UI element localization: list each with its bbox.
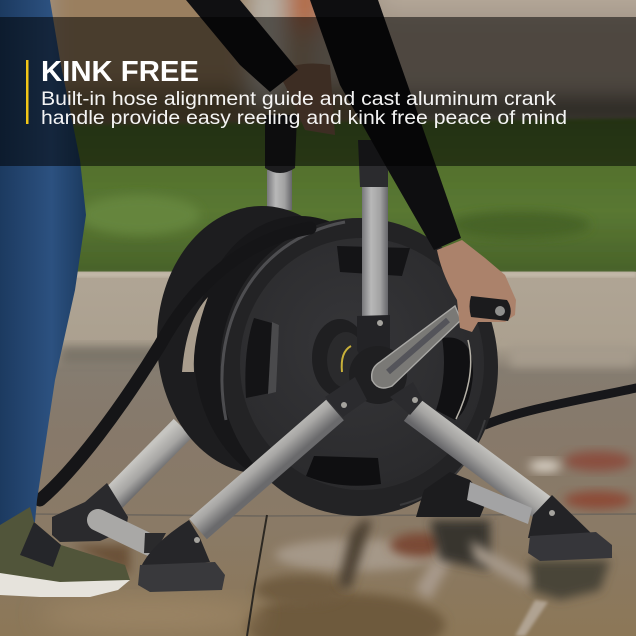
yellow accent bar [26, 60, 28, 124]
rear flange [157, 206, 367, 474]
hub ring [312, 319, 368, 397]
rear pole [265, 115, 297, 210]
left sleeve [186, 0, 298, 92]
slot: left [245, 318, 279, 398]
vertical pole [362, 187, 388, 319]
body text: handle provide easy reeling and kink free peace of mind [41, 108, 567, 129]
reel frame [138, 140, 612, 592]
slot: bottom [306, 456, 381, 486]
slot: right [436, 337, 473, 420]
blurred wall [0, 0, 636, 140]
front left foot [138, 520, 225, 592]
center bracket [325, 315, 423, 417]
hose reel [157, 206, 498, 516]
rear leg and foot [52, 428, 183, 553]
front right foot [528, 495, 612, 561]
crank handle [470, 296, 511, 321]
rear flange opening [182, 297, 208, 372]
person: jeans [0, 0, 86, 527]
person: arm sleeves and hands [186, 0, 516, 332]
slot: top [337, 246, 410, 276]
hose: right section on ground [485, 388, 636, 425]
front flange rim [220, 218, 498, 516]
ground [0, 272, 636, 636]
body text: Built-in hose alignment guide and cast aluminum crank [41, 89, 557, 110]
black hose wrapped on reel [40, 228, 310, 500]
person: shoe [0, 507, 130, 597]
dark text banner [0, 17, 636, 166]
title: KINK FREE [41, 56, 199, 88]
grass [60, 118, 636, 273]
body text [41, 89, 567, 129]
front left leg [198, 410, 335, 529]
back right tube and foot [416, 472, 487, 517]
hand on pole [278, 64, 335, 135]
front right leg [412, 410, 546, 510]
front flange face [240, 238, 484, 490]
crank hand [437, 240, 516, 332]
drum [194, 216, 406, 488]
crank arm [372, 306, 461, 388]
right sleeve [310, 0, 461, 250]
yellow hose guide ring [342, 346, 351, 372]
